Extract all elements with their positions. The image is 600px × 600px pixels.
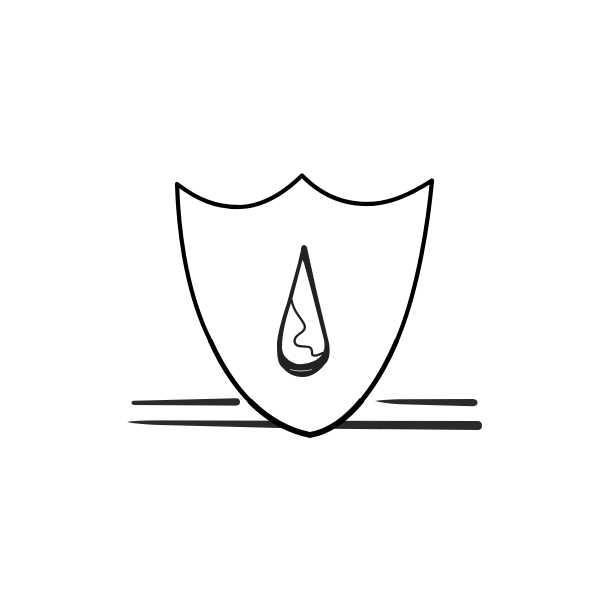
ground stroke: upper right [375, 399, 478, 406]
shield bottom tip, thickest [250, 400, 362, 435]
icon: water drop [277, 245, 330, 377]
drop highlight [290, 370, 312, 371]
shield [177, 176, 432, 435]
ground stroke: upper left [132, 398, 240, 406]
inner squiggle line [292, 300, 323, 356]
ground stroke: long lower [127, 420, 482, 430]
drop body [277, 245, 330, 377]
shield lower edge, thicker [210, 340, 397, 435]
shield outline [177, 176, 432, 435]
